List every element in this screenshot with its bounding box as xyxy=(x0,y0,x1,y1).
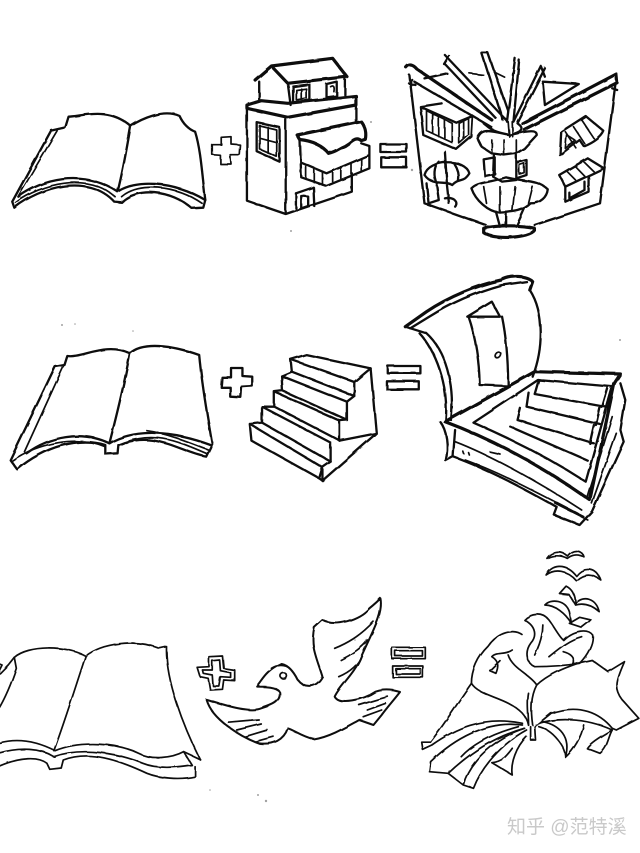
icon: equals sign xyxy=(387,366,420,389)
row 2: book plus stairs equals book-stairs xyxy=(10,276,625,525)
icon: open book xyxy=(12,113,205,208)
icon: open book xyxy=(0,643,200,778)
icon: book with door and stairs xyxy=(405,276,625,525)
icon: staircase xyxy=(250,355,376,481)
icon: book turning into flower and birds xyxy=(421,551,639,788)
icon: dove xyxy=(206,598,400,744)
icon: plus sign xyxy=(197,656,235,690)
icon: equals sign xyxy=(380,144,407,167)
icon: open book xyxy=(10,346,212,469)
icon: plus sign xyxy=(212,137,240,164)
background specks xyxy=(61,121,621,802)
row 1: book plus building equals book-building xyxy=(12,53,617,237)
icon: building with balcony xyxy=(247,58,369,214)
icon: book with pop-up shops xyxy=(406,53,617,237)
watermark: 知乎 @范特溪 xyxy=(507,816,627,838)
icon: plus sign xyxy=(221,368,252,397)
icon: equals sign xyxy=(392,647,425,677)
row 3: book plus dove equals book-flower xyxy=(0,551,639,788)
